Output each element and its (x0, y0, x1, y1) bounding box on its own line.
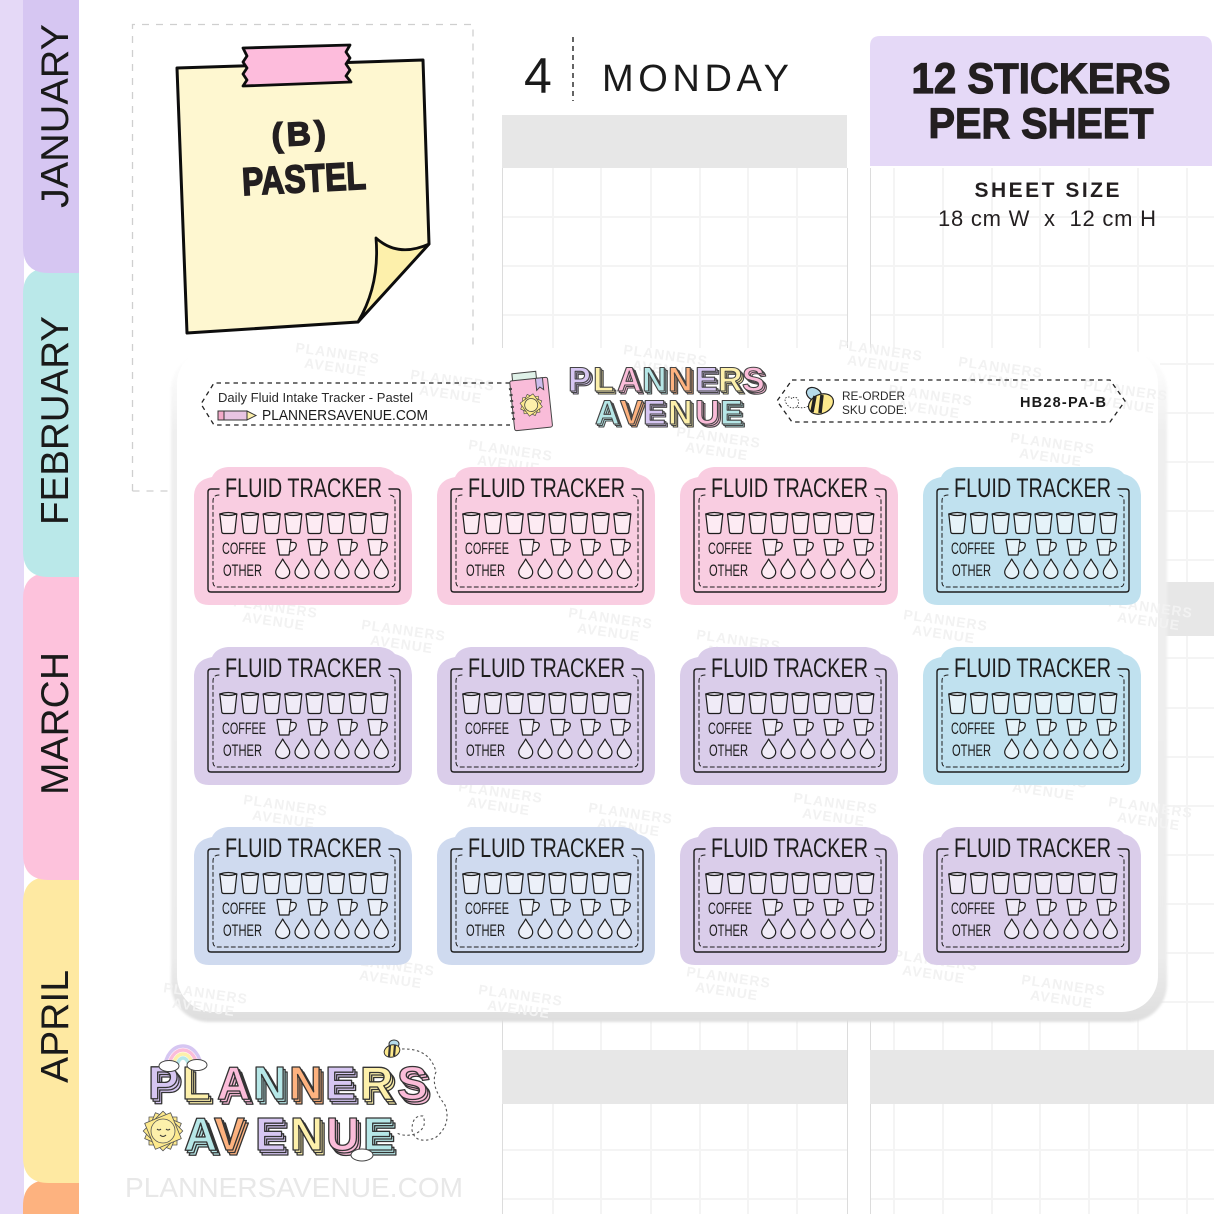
watermarks: PLANNERS (477, 981, 564, 1009)
tab label: March: MARCH (34, 652, 77, 795)
sticker row 1 col 4: FLUID TRACKER (954, 473, 1111, 503)
sticker row 1 col 3: FLUID TRACKER (711, 473, 868, 503)
sticker row 3 col 3: COFFEE (708, 899, 752, 918)
watermarks: AVENUE (704, 642, 769, 666)
watermarks: AVENUE (1091, 392, 1156, 416)
sticker row 3 col 4: COFFEE (951, 899, 995, 918)
watermarks: PLANNERS (1107, 793, 1194, 821)
watermarks: AVENUE (576, 620, 641, 644)
icon: pencil (218, 411, 256, 420)
sticker row 2 col 2: OTHER (466, 741, 505, 760)
icon: rainbow (165, 1046, 201, 1068)
sticker row 1 col 2 (437, 467, 655, 605)
watermarks: AVENUE (241, 609, 306, 633)
sticker row 2 col 1: FLUID TRACKER (225, 653, 382, 683)
watermarks: AVENUE (896, 397, 961, 421)
sticker count banner: 12 STICKERS (912, 55, 1170, 103)
sticker row 1 col 4 (923, 467, 1141, 605)
product name label: PLANNERSAVENUE.COM (262, 407, 428, 424)
watermarks: PLANNERS (232, 593, 319, 621)
watermarks: AVENUE (684, 439, 749, 463)
sticker row 1 col 4: OTHER (952, 561, 991, 580)
tab label: April: APRIL (34, 970, 77, 1083)
sticker row 3 col 1: FLUID TRACKER (225, 833, 382, 863)
watermarks: PLANNERS (409, 366, 496, 394)
sticker row 2 col 2 (437, 647, 655, 785)
sticker row 2 col 4: FLUID TRACKER (954, 653, 1111, 683)
watermarks: AVENUE (596, 815, 661, 839)
watermarks: AVENUE (466, 794, 531, 818)
watermarks: PLANNERS (567, 604, 654, 632)
sticker row 1 col 2: FLUID TRACKER (468, 473, 625, 503)
sticker row 2 col 4: OTHER (952, 741, 991, 760)
icon: sun (143, 1111, 183, 1151)
reorder SKU label: RE-ORDER (842, 389, 905, 403)
watermarks: AVENUE (476, 452, 541, 476)
watermarks: PLANNERS (294, 339, 381, 367)
sticker row 1 col 2: OTHER (466, 561, 505, 580)
watermarks: PLANNERS (957, 353, 1044, 381)
icon: bee (785, 385, 837, 418)
sticker row 1 col 1: COFFEE (222, 539, 266, 558)
icon: clouds (159, 1060, 373, 1161)
watermarks: PLANNERS (892, 946, 979, 974)
note label (239, 112, 367, 204)
sticker row 2 col 3: FLUID TRACKER (711, 653, 868, 683)
sticker row 3 col 4: FLUID TRACKER (954, 833, 1111, 863)
month tabs (0, 0, 79, 1214)
tab label: February: FEBRUARY (34, 316, 77, 525)
logo: Planners Avenue small: AVENUE (595, 394, 743, 432)
product name label: Daily Fluid Intake Tracker - Pastel (218, 391, 413, 405)
watermarks: PLANNERS (457, 778, 544, 806)
watermarks: AVENUE (418, 382, 483, 406)
sticker row 3 col 3: FLUID TRACKER (711, 833, 868, 863)
reorder SKU label: HB28-PA-B (1020, 395, 1106, 411)
watermarks: AVENUE (486, 997, 551, 1021)
sheet size: SHEET SIZE (974, 179, 1120, 202)
watermarks: AVENUE (694, 979, 759, 1003)
sticker row 3 col 2: FLUID TRACKER (468, 833, 625, 863)
sticker row 3 col 4: OTHER (952, 921, 991, 940)
watermarks: AVENUE (171, 995, 236, 1019)
watermarks (161, 336, 1194, 1023)
sticker row 1 col 3: COFFEE (708, 539, 752, 558)
sticker row 3 col 1: OTHER (223, 921, 262, 940)
sticker row 3 col 2 (437, 827, 655, 965)
watermarks: AVENUE (369, 632, 434, 656)
tab label: January: JANUARY (34, 24, 77, 208)
sticker row 3 col 3: OTHER (709, 921, 748, 940)
watermarks: PLANNERS (837, 336, 924, 364)
sheet size (938, 179, 1156, 231)
sticker row 3 col 4 (923, 827, 1141, 965)
sticker row 2 col 3: COFFEE (708, 719, 752, 738)
day header: 4 (524, 48, 552, 104)
product name label (201, 383, 510, 425)
watermarks: AVENUE (966, 369, 1031, 393)
logo: Planners Avenue small: PLANNERS (568, 361, 765, 399)
watermarks: AVENUE (303, 355, 368, 379)
watermarks: PLANNERS (360, 616, 447, 644)
watermarks: AVENUE (251, 807, 316, 831)
sticker row 3 col 1: COFFEE (222, 899, 266, 918)
watermarks: PLANNERS (1107, 593, 1194, 621)
sticker row 2 col 3 (680, 647, 898, 785)
sticker row 2 col 4 (923, 647, 1141, 785)
sticker count banner: PER SHEET (928, 100, 1154, 148)
icon: bee trail (397, 1049, 447, 1140)
note label: (B) (271, 114, 327, 154)
sticker row 3 col 1 (194, 827, 412, 965)
watermarks: AVENUE (1011, 779, 1076, 803)
icon: notebook with sun (509, 370, 553, 431)
day header (524, 37, 789, 104)
sticker row 2 col 2: FLUID TRACKER (468, 653, 625, 683)
watermarks: PLANNERS (675, 423, 762, 451)
sticker count banner (870, 36, 1212, 166)
sticker row 3 col 2: OTHER (466, 921, 505, 940)
sticky note: B pastel (177, 45, 429, 333)
logo: Planners Avenue large: PLANNERS (148, 1057, 428, 1109)
watermarks: PLANNERS (695, 626, 782, 654)
watermarks: AVENUE (631, 357, 696, 381)
sticker row 1 col 1: FLUID TRACKER (225, 473, 382, 503)
watermarks: PLANNERS (792, 789, 879, 817)
sticker row 2 col 3: OTHER (709, 741, 748, 760)
watermarks: AVENUE (801, 805, 866, 829)
watermarks: PLANNERS (1009, 429, 1096, 457)
watermarks: PLANNERS (349, 951, 436, 979)
watermarks: PLANNERS (467, 436, 554, 464)
watermarks: PLANNERS (1002, 763, 1089, 791)
watermarks: PLANNERS (242, 791, 329, 819)
note fold (358, 238, 429, 322)
watermarks: PLANNERS (685, 963, 772, 991)
sheet size: 18 cm W x 12 cm H (938, 206, 1156, 231)
sticker row 1 col 1: OTHER (223, 561, 262, 580)
watermarks: PLANNERS (587, 799, 674, 827)
watermarks: AVENUE (358, 967, 423, 991)
dashed box around note (132, 24, 473, 491)
watermarks: AVENUE (901, 962, 966, 986)
watermarks: AVENUE (846, 352, 911, 376)
logo: Planners Avenue small (568, 361, 768, 435)
watermarks: PLANNERS (1082, 376, 1169, 404)
sticker row 2 col 4: COFFEE (951, 719, 995, 738)
sticker row 2 col 1 (194, 647, 412, 785)
watermarks: PLANNERS (902, 606, 989, 634)
reorder SKU label (777, 380, 1125, 422)
sticker row 1 col 3 (680, 467, 898, 605)
watermarks: PLANNERS (162, 979, 249, 1007)
sticker row 1 col 4: COFFEE (951, 539, 995, 558)
logo: Planners Avenue large: AVENUE (184, 1108, 394, 1160)
watermarks: AVENUE (1116, 809, 1181, 833)
note label: PASTEL (241, 155, 367, 204)
sticker row 2 col 1: COFFEE (222, 719, 266, 738)
sticker row 1 col 2: COFFEE (465, 539, 509, 558)
watermarks: AVENUE (911, 622, 976, 646)
watermarks: PLANNERS (622, 341, 709, 369)
day header: MONDAY (602, 58, 789, 100)
logo: Planners Avenue large (143, 1040, 447, 1165)
watermarks: PLANNERS (887, 381, 974, 409)
sticker row 1 col 3: OTHER (709, 561, 748, 580)
washi tape (243, 45, 351, 86)
sticker row 3 col 2: COFFEE (465, 899, 509, 918)
sticker row 2 col 2: COFFEE (465, 719, 509, 738)
sticker row 2 col 1: OTHER (223, 741, 262, 760)
sticker sheet (161, 336, 1194, 1023)
watermarks: AVENUE (1018, 445, 1083, 469)
sticker row 3 col 3 (680, 827, 898, 965)
reorder SKU label: SKU CODE: (842, 403, 907, 417)
sticker row 1 col 1 (194, 467, 412, 605)
watermarks: AVENUE (1116, 609, 1181, 633)
website watermark: PLANNERSAVENUE.COM (125, 1172, 463, 1203)
watermarks: AVENUE (1029, 987, 1094, 1011)
planner grid columns (502, 115, 1214, 1214)
watermarks: PLANNERS (1020, 971, 1107, 999)
icon: bee (382, 1040, 402, 1059)
